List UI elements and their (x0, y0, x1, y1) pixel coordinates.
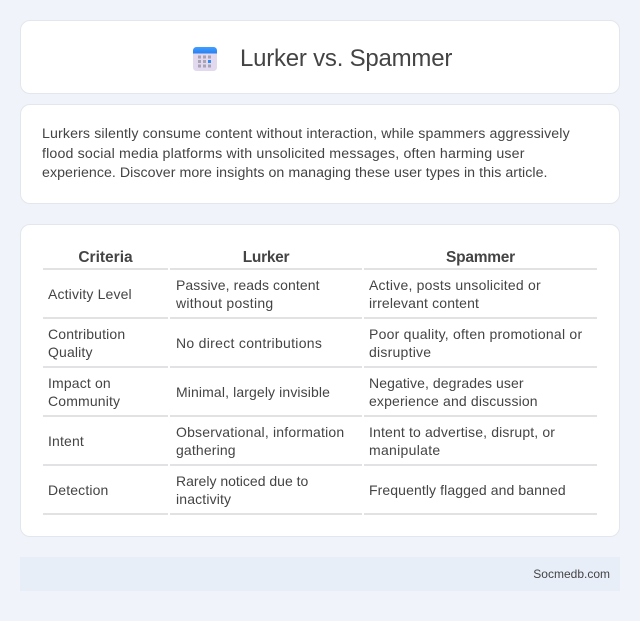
row: detection: Detection (48, 482, 108, 498)
intro text: Lurkers silently consume content without interaction, while spammers aggressively (42, 126, 570, 142)
row: detection: Frequently flagged and banned (369, 482, 566, 498)
footer bar (20, 557, 620, 591)
icon: calendar (193, 47, 217, 71)
row: contribution quality (48, 326, 582, 360)
footer text: Socmedb.com (533, 567, 610, 581)
row: impact on community (48, 375, 538, 409)
row: activity level: Active, posts unsolicited or (369, 277, 541, 293)
panel: comparison table (20, 224, 620, 537)
row: contribution quality: Quality (48, 344, 93, 360)
intro text: flood social media platforms with unsolicited messages, often harming user (42, 146, 525, 162)
row: detection: Rarely noticed due to (176, 473, 308, 489)
column headers: Spammer (446, 249, 515, 266)
row: impact on community: Community (48, 393, 120, 409)
column headers (78, 249, 515, 266)
row: detection: inactivity (176, 491, 231, 507)
row: contribution quality: disruptive (369, 344, 431, 360)
row: intent (48, 424, 555, 458)
row: intent: gathering (176, 442, 236, 458)
row: impact on community: experience and discussion (369, 393, 538, 409)
row: activity level: without posting (176, 295, 273, 311)
row: contribution quality: No direct contributions (176, 335, 322, 351)
row: activity level: Passive, reads content (176, 277, 320, 293)
row: activity level: irrelevant content (369, 295, 479, 311)
intro text: experience. Discover more insights on managing these user types in this article. (42, 165, 548, 181)
row: impact on community: Minimal, largely invisible (176, 384, 330, 400)
row: impact on community: Negative, degrades user (369, 375, 524, 391)
row: intent: Intent (48, 433, 84, 449)
title: Lurker vs. Spammer (240, 45, 452, 72)
row: contribution quality: Poor quality, often promotional or (369, 326, 582, 342)
row: contribution quality: Contribution (48, 326, 125, 342)
intro text (42, 126, 570, 181)
row: intent: manipulate (369, 442, 440, 458)
row: activity level (48, 277, 541, 311)
intro text panel (20, 104, 620, 204)
row: activity level: Activity Level (48, 286, 132, 302)
column headers: Lurker (243, 249, 289, 266)
column headers: Criteria (78, 249, 133, 266)
title card (20, 20, 620, 94)
row: impact on community: Impact on (48, 375, 111, 391)
row: intent: Intent to advertise, disrupt, or (369, 424, 555, 440)
row: intent: Observational, information (176, 424, 344, 440)
